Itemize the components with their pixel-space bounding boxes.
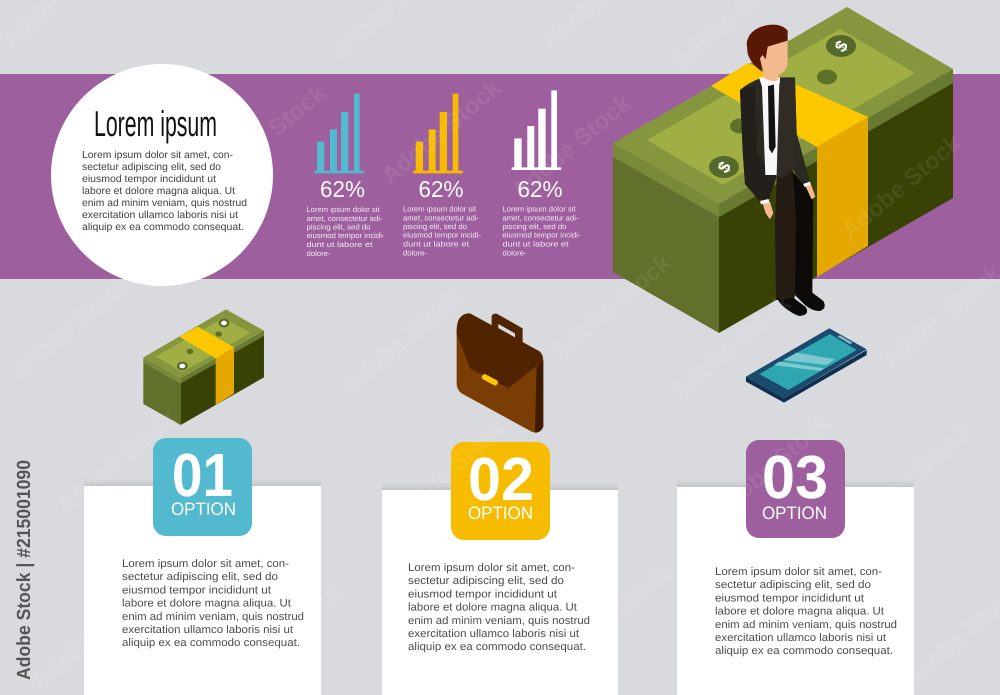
- intro text: [82, 150, 247, 233]
- watermarks: Adobe Stock: [337, 284, 467, 400]
- stat 1 text: [306, 205, 385, 258]
- stat 2 text: Lorem ipsum dolor sit: [403, 204, 477, 214]
- far leg: [792, 171, 813, 295]
- option 1 badge: OPTION: [171, 499, 236, 519]
- intro text: enim ad minim veniam, quis nostrud: [82, 198, 247, 209]
- option 2 badge: OPTION: [468, 503, 533, 523]
- shoes: [777, 293, 825, 316]
- option 3 text: labore et dolore magna aliqua. Ut: [715, 606, 884, 618]
- stat 1 value: 62%: [320, 176, 365, 202]
- intro heading: Lorem ipsum: [94, 103, 217, 144]
- lapel: [777, 78, 797, 178]
- stat 3 text: dolore-: [502, 248, 527, 258]
- near sleeve: [740, 87, 777, 202]
- intro text: aliquip ex ea commodo consequat.: [82, 222, 244, 233]
- option 2 text: aliquip ex ea commodo consequat.: [408, 641, 586, 653]
- option 3 badge: [746, 440, 845, 538]
- case side: [535, 360, 543, 433]
- stat 1 text: amet, consectetur adi-: [306, 214, 383, 223]
- intro text: eiusmod tempor incididunt ut: [82, 174, 216, 185]
- option 1 text: Lorem ipsum dolor sit amet, con-: [122, 558, 289, 570]
- bar chart: blue: [314, 94, 364, 173]
- option 2 text: [408, 562, 590, 653]
- option 3 text: Lorem ipsum dolor sit amet, con-: [715, 566, 882, 578]
- face: [759, 36, 788, 81]
- stat 3 text: amet, consectetur adi-: [502, 214, 579, 222]
- option 3 text: exercitation ullamco laboris nisi ut: [715, 632, 886, 644]
- option 2 text: sectetur adipiscing elit, sed do: [408, 575, 564, 587]
- icon: briefcase: [457, 313, 543, 433]
- option 3 badge: OPTION: [762, 503, 827, 523]
- stat 2 text: dunt ut labore et: [403, 240, 470, 248]
- option 1 text: enim ad minim veniam, quis nostrud: [122, 611, 304, 623]
- option 2 badge: [451, 442, 550, 540]
- tie: [768, 85, 776, 153]
- stat 3 value: 62%: [518, 176, 562, 202]
- watermarks: Adobe Stock: [7, 269, 137, 385]
- stat 1 text: dunt ut labore et: [306, 240, 374, 249]
- watermarks: Adobe Stock: [217, 579, 347, 695]
- stat 2 text: piscing elit, sed do: [403, 222, 467, 231]
- watermarks: Adobe Stock: [547, 249, 677, 365]
- option 1 text: aliquip ex ea commodo consequat.: [122, 637, 300, 649]
- stat 3 text: eiusmod tempor incidi-: [502, 230, 581, 240]
- watermarks: Adobe Stock: [847, 419, 977, 535]
- option 1 text: eiusmod tempor incididunt ut: [122, 584, 271, 596]
- option 1 text: labore et dolore magna aliqua. Ut: [122, 598, 291, 610]
- option 1 badge: 01: [172, 441, 233, 509]
- stat 1 text: dolore-: [306, 249, 331, 258]
- stat 3 text: piscing elit, sed do: [502, 222, 566, 231]
- option 3 text: eiusmod tempor incididunt ut: [715, 592, 864, 604]
- option 2 text: labore et dolore magna aliqua. Ut: [408, 602, 577, 614]
- stat 3 text: dunt ut labore et: [502, 240, 570, 248]
- purple banner: [0, 74, 1000, 279]
- option 1 badge: [153, 438, 252, 536]
- icon: large money stack: [613, 7, 953, 333]
- flap: [457, 313, 542, 388]
- watermarks: Adobe Stock: [507, 89, 637, 205]
- panel: option 2: [382, 442, 618, 695]
- figure: businessman sitting: [740, 25, 825, 316]
- stat 2 text: [403, 204, 481, 258]
- bar chart: yellow: [413, 94, 463, 173]
- intro circle panel: [51, 64, 273, 286]
- watermarks: Adobe Stock: [202, 79, 332, 195]
- icon: large money stack: $: [831, 37, 852, 56]
- hands: [763, 183, 815, 219]
- watermarks: Adobe Stock: [837, 129, 967, 245]
- watermarks: Adobe Stock: [547, 559, 677, 675]
- intro text: labore et dolore magna aliqua. Ut: [82, 186, 235, 197]
- option 2 text: enim ad minim veniam, quis nostrud: [408, 615, 590, 627]
- option 1 text: [122, 558, 304, 649]
- watermarks: Adobe Stock: [707, 409, 837, 525]
- panel: option 3: [677, 440, 914, 695]
- stat 2 text: amet, consectetur adi-: [403, 214, 479, 222]
- option 2 text: exercitation ullamco laboris nisi ut: [408, 628, 579, 640]
- option 2 badge: 02: [468, 445, 534, 513]
- watermarks: Adobe Stock: [382, 414, 512, 530]
- near leg: [775, 171, 796, 300]
- option 2 text: Lorem ipsum dolor sit amet, con-: [408, 562, 575, 574]
- case body: [457, 313, 543, 433]
- option 3 badge: 03: [762, 443, 828, 511]
- bar chart: white: [512, 90, 561, 170]
- option 2 text: eiusmod tempor incididunt ut: [408, 588, 557, 600]
- option 3 text: [715, 566, 897, 657]
- option 1 text: exercitation ullamco laboris nisi ut: [122, 624, 293, 636]
- stat 2 text: eiusmod tempor incidi-: [403, 230, 481, 240]
- vertical stock id text: Adobe Stock | #215001090: [14, 460, 35, 680]
- icon: smartphone: [746, 328, 867, 403]
- shirt: [759, 77, 780, 175]
- intro text: Lorem ipsum dolor sit amet, con-: [82, 150, 233, 161]
- stat 1 text: Lorem ipsum dolor sit: [306, 205, 380, 214]
- watermarks: Adobe Stock: [27, 579, 157, 695]
- stat 1 text: piscing elit, sed do: [306, 222, 370, 232]
- stat 2 text: dolore-: [403, 248, 427, 258]
- icon: large money stack: $: [714, 158, 735, 177]
- stat 2 value: 62%: [418, 176, 464, 202]
- jacket: [740, 77, 810, 202]
- handle: [492, 314, 523, 345]
- stat 1 text: eiusmod tempor incidi-: [306, 231, 385, 240]
- stat 3 text: [502, 204, 581, 258]
- icon: small money stack: [143, 309, 264, 425]
- intro text: sectetur adipiscing elit, sed do: [82, 162, 221, 173]
- option 3 text: aliquip ex ea commodo consequat.: [715, 645, 893, 657]
- stat 3 text: Lorem ipsum dolor sit: [502, 204, 576, 214]
- watermarks: Adobe Stock: [377, 74, 507, 190]
- panel: option 1: [84, 438, 321, 695]
- option 3 text: enim ad minim veniam, quis nostrud: [715, 619, 897, 631]
- watermarks: Adobe Stock: [52, 404, 182, 520]
- option 3 text: sectetur adipiscing elit, sed do: [715, 579, 871, 591]
- intro text: exercitation ullamco laboris nisi ut: [82, 210, 238, 221]
- cuffs: [760, 182, 811, 204]
- option 1 text: sectetur adipiscing elit, sed do: [122, 571, 278, 583]
- watermarks: Adobe Stock: [667, 289, 797, 405]
- clasp: [481, 373, 499, 386]
- hair: [747, 25, 788, 72]
